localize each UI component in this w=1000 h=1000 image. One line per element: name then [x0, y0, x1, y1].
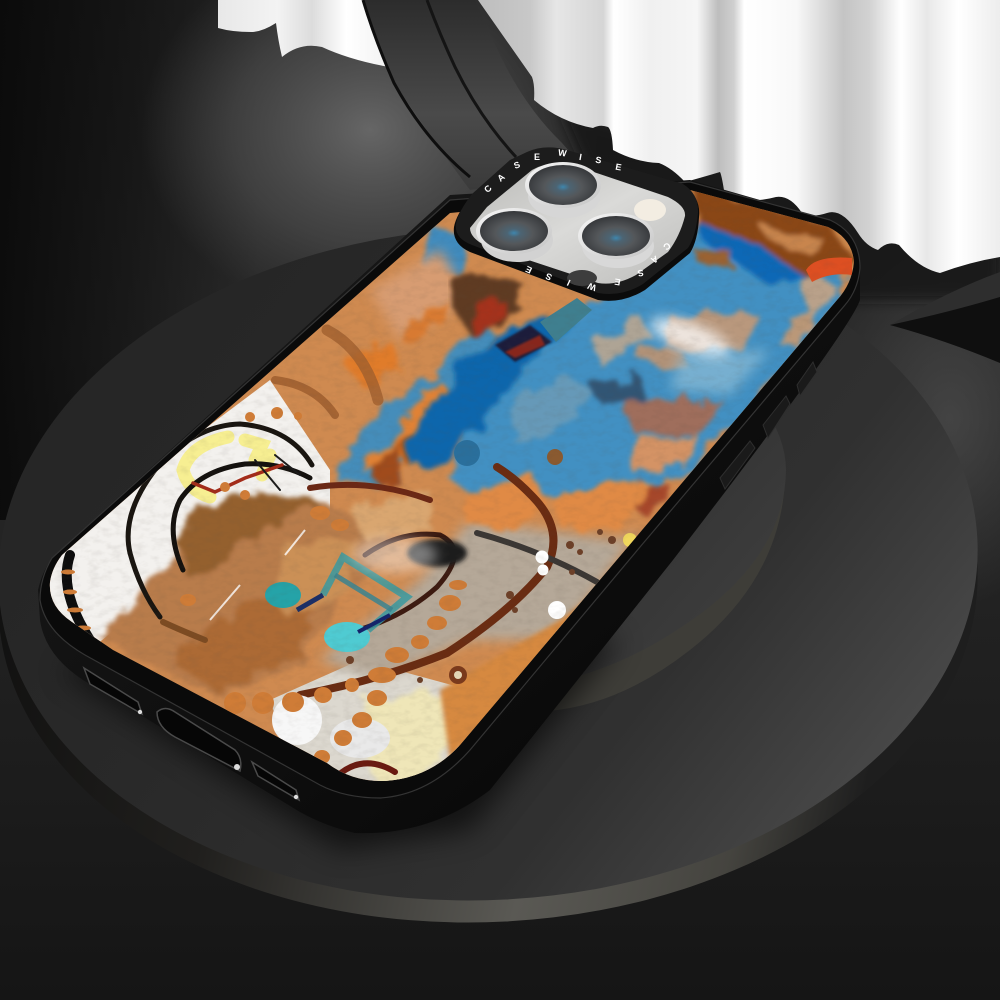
- printed artwork: [50, 190, 854, 781]
- brand text on ring: I: [565, 278, 572, 288]
- splash lines in white: [210, 530, 305, 620]
- dark patch: [495, 325, 552, 362]
- white blobs: [272, 695, 390, 758]
- camera bump: [454, 147, 699, 301]
- blue field: [330, 225, 850, 510]
- top lens: [525, 162, 601, 218]
- dark smudge with highlight: [407, 539, 467, 567]
- brand text on ring: S: [595, 155, 602, 165]
- brand text on ring: A: [649, 254, 660, 266]
- bottom ports: [84, 668, 299, 800]
- curtain left: [218, 0, 389, 67]
- brand text on ring: A: [495, 171, 507, 184]
- case glossy rim: [40, 182, 860, 798]
- phone case: [30, 147, 870, 833]
- brand text on ring: I: [578, 152, 583, 162]
- peach patches on blue: [510, 270, 840, 440]
- orange base: [50, 190, 854, 781]
- rust patches: [460, 375, 725, 530]
- small round platform: [400, 320, 786, 711]
- pale blue wash: [670, 350, 770, 395]
- black swirl lines: [67, 330, 597, 778]
- teal square: [540, 298, 592, 342]
- deep blue band: [405, 315, 575, 470]
- brand text on ring: S: [544, 271, 554, 283]
- case side: [38, 180, 860, 833]
- gray and cream lower field: [272, 662, 459, 781]
- brand text on ring: W: [586, 280, 598, 293]
- brown wash: [98, 490, 430, 698]
- music note: [265, 557, 407, 652]
- brand text on ring: W: [558, 147, 568, 159]
- bright orange strokes: [345, 300, 455, 490]
- right lens: [578, 213, 654, 268]
- white corner: [50, 380, 330, 642]
- brand text on ring: [482, 147, 673, 293]
- brand text on ring: S: [512, 159, 522, 171]
- peach wash top left: [370, 250, 470, 340]
- left lens: [476, 208, 553, 262]
- yellow shape: [183, 437, 270, 497]
- red orange circle: [806, 258, 852, 282]
- brand text on ring: E: [524, 264, 534, 276]
- curtain right: [478, 0, 1000, 280]
- right small stand: [890, 272, 1000, 363]
- phone shadow: [60, 600, 620, 850]
- brand text on ring: S: [637, 268, 644, 278]
- brand text on ring: E: [615, 162, 622, 172]
- side buttons: [720, 362, 817, 489]
- paint grain: [52, 236, 847, 780]
- clear window: [470, 163, 685, 284]
- sheen top right: [646, 309, 734, 365]
- top right rust and blue: [690, 185, 856, 285]
- brown circle near camera: [455, 270, 525, 335]
- arc stand behind phone: [363, 0, 590, 190]
- bump top: [456, 147, 698, 294]
- port highlights: [138, 710, 298, 799]
- large round platform: [0, 203, 995, 947]
- brand text on ring: E: [534, 152, 540, 162]
- bump base: [454, 150, 699, 301]
- brand text on ring: E: [614, 277, 621, 287]
- brand text on ring: C: [482, 183, 494, 195]
- droplets: [61, 407, 637, 764]
- lidar sensor: [567, 270, 597, 286]
- brand text on ring: C: [661, 240, 673, 253]
- flash: [634, 199, 666, 221]
